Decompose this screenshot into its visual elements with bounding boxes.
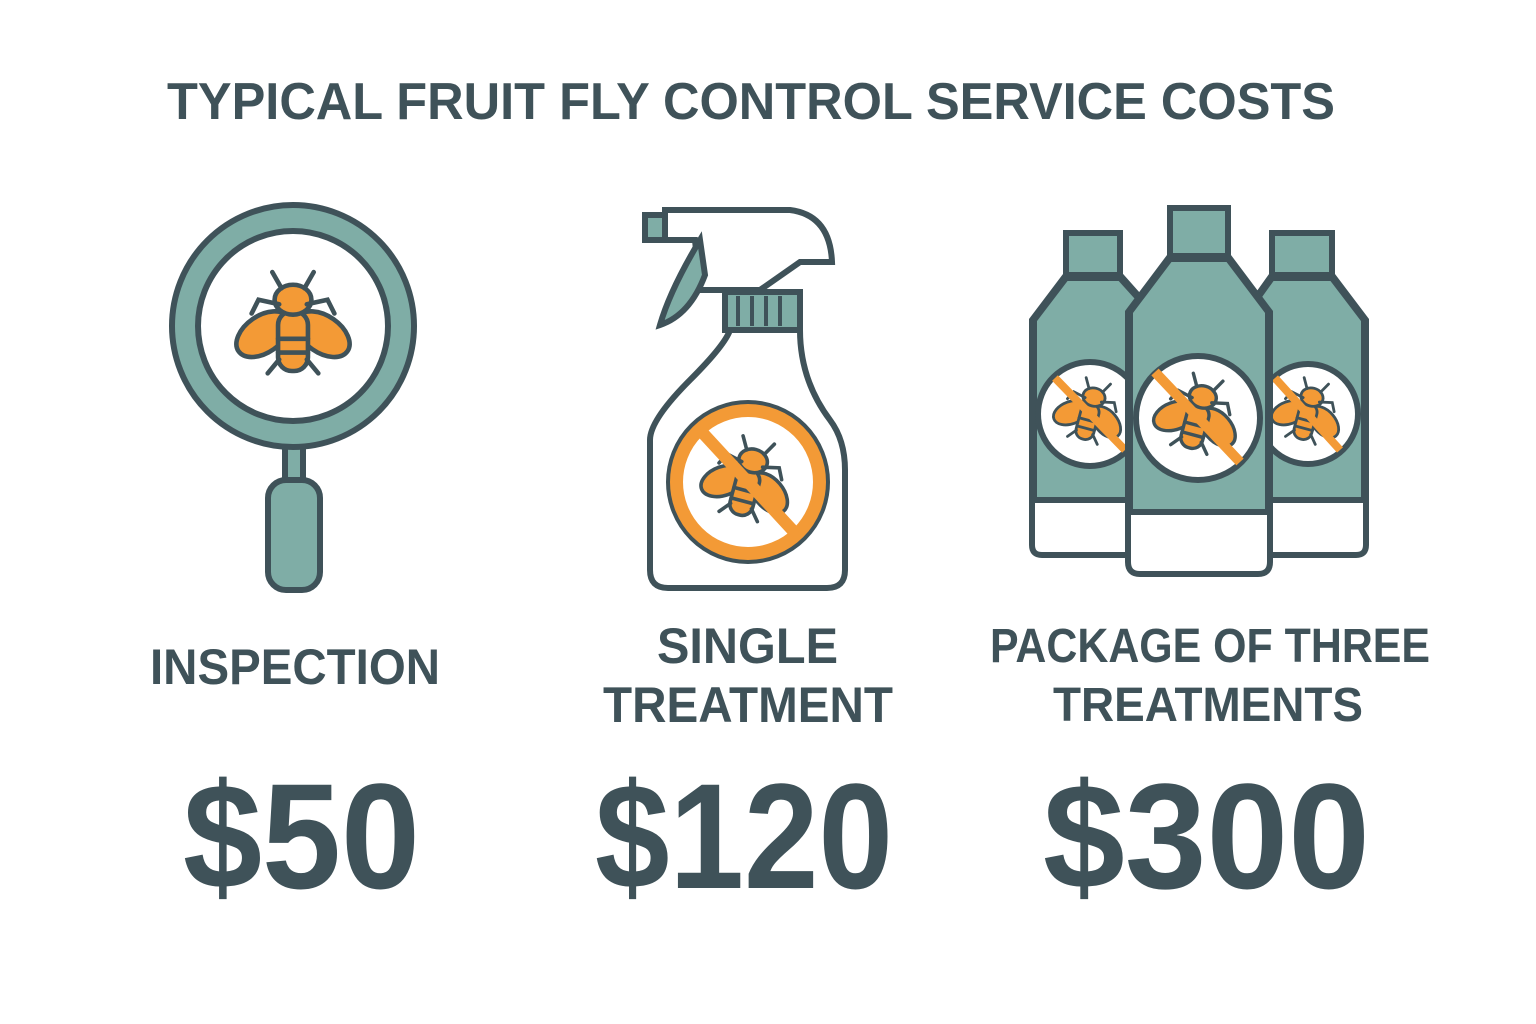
price: $50: $50: [183, 752, 420, 920]
label: single treatment: SINGLE: [657, 618, 838, 674]
price: $120: $120: [595, 752, 893, 920]
icon: three bottles: [1032, 208, 1366, 574]
label: single treatment: TREATMENT: [603, 677, 893, 733]
icon: magnifier: [172, 205, 414, 590]
label: package of three treatments: TREATMENTS: [1053, 679, 1363, 732]
price: $300: $300: [1043, 752, 1370, 920]
title: TYPICAL FRUIT FLY CONTROL SERVICE COSTS: [167, 73, 1335, 131]
label: package of three treatments: PACKAGE OF THREE: [990, 620, 1430, 673]
label: inspection: INSPECTION: [150, 639, 440, 695]
icon: spray bottle: [645, 210, 845, 588]
